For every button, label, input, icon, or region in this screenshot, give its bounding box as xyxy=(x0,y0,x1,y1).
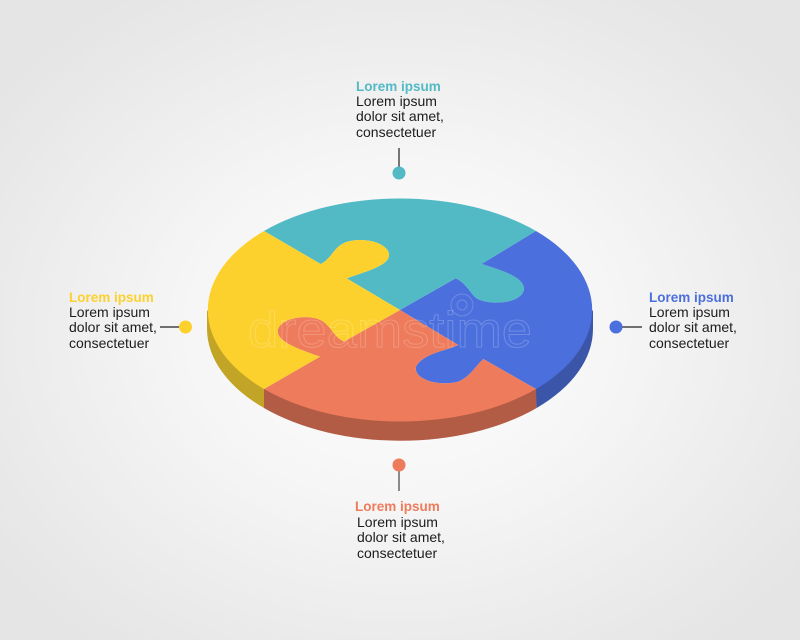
label: orange: Lorem ipsum xyxy=(357,514,438,530)
disc side: yellow xyxy=(207,310,264,408)
label: yellow: Lorem ipsum xyxy=(69,290,154,305)
puzzle piece: orange xyxy=(264,310,536,422)
label: teal: dolor sit amet, xyxy=(356,108,444,124)
label: teal: consectetuer xyxy=(356,124,436,140)
label: teal: Lorem ipsum xyxy=(356,92,437,108)
label: blue: dolor sit amet, xyxy=(649,319,737,335)
disc side: orange xyxy=(264,389,537,441)
puzzle piece: blue xyxy=(400,231,592,389)
connector: orange xyxy=(392,458,406,491)
label: teal: Lorem ipsum xyxy=(356,79,441,94)
label: yellow: dolor sit amet, xyxy=(69,319,157,335)
connector: teal xyxy=(392,148,406,180)
label: orange: Lorem ipsum xyxy=(355,499,440,514)
puzzle piece: yellow xyxy=(208,231,400,389)
label: yellow: consectetuer xyxy=(69,334,149,350)
label: orange: consectetuer xyxy=(357,544,437,560)
label: teal xyxy=(356,79,444,140)
watermark: dreamstime xyxy=(248,302,532,358)
connector: blue xyxy=(610,320,642,334)
label: orange xyxy=(355,499,445,560)
disc side: blue xyxy=(536,310,593,408)
label: yellow: Lorem ipsum xyxy=(69,304,150,320)
label: blue xyxy=(649,290,737,350)
label: blue: Lorem ipsum xyxy=(649,304,730,320)
label: blue: consectetuer xyxy=(649,334,729,350)
label: yellow xyxy=(69,290,157,350)
label: orange: dolor sit amet, xyxy=(357,529,445,545)
puzzle piece: teal xyxy=(264,198,536,310)
label: blue: Lorem ipsum xyxy=(649,290,734,305)
connector: yellow xyxy=(160,320,192,334)
